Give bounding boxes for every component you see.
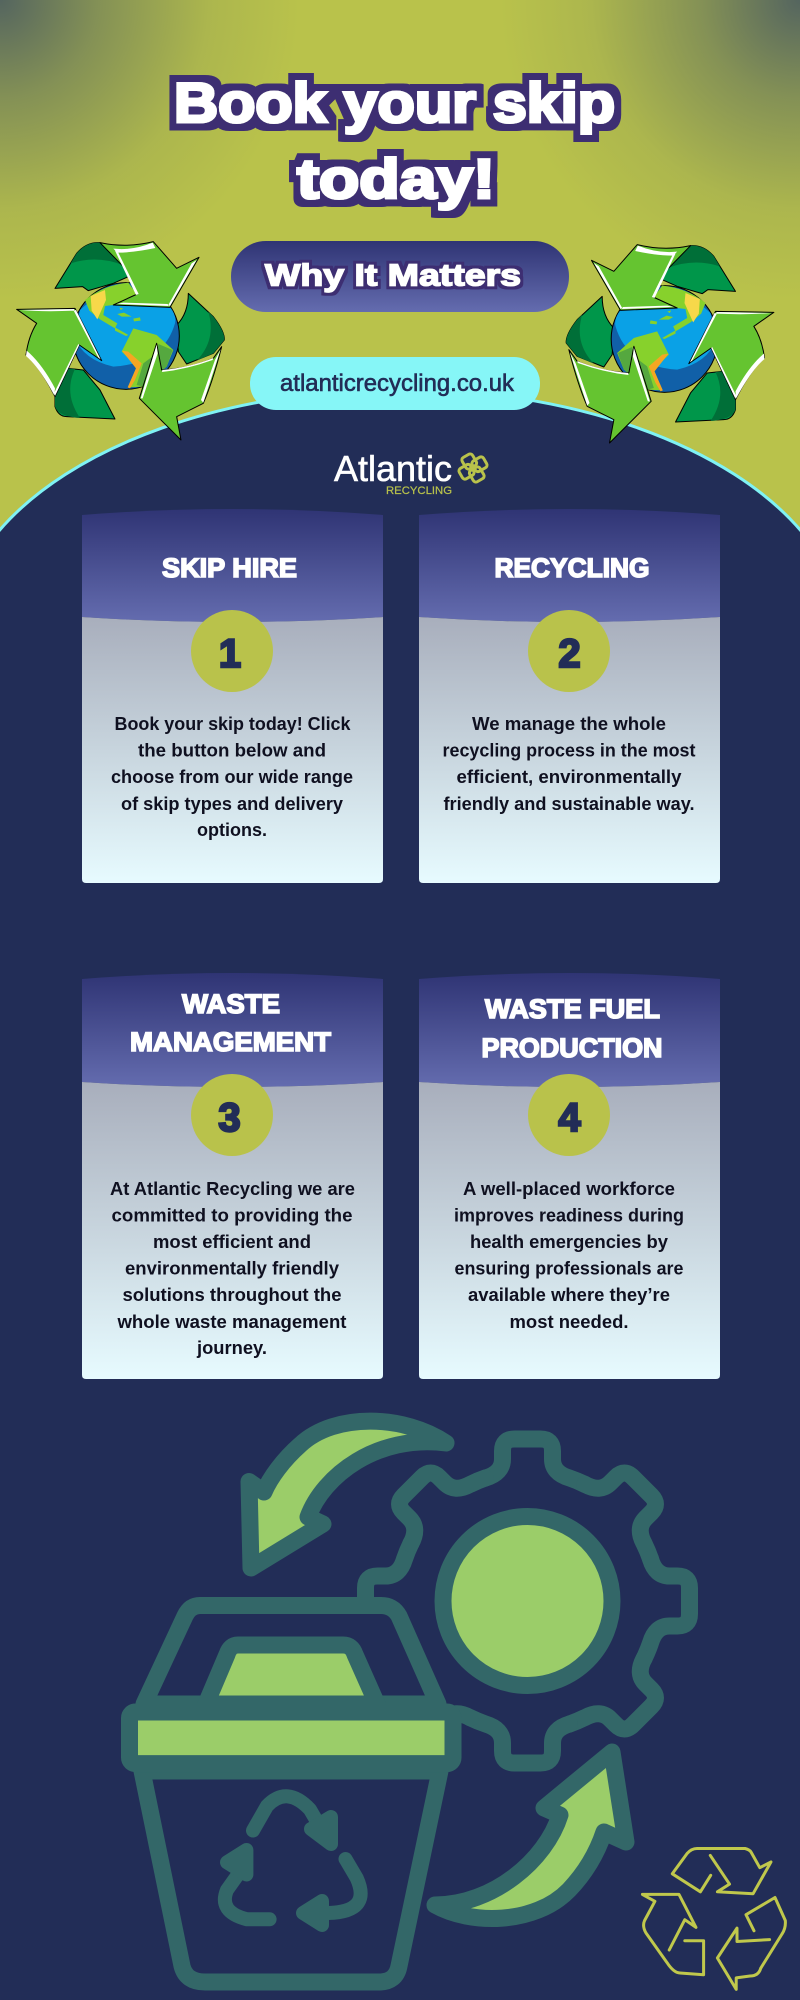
panel: waste fuel production: ensuring professionals are [454, 1258, 684, 1278]
panel: waste management: MANAGEMENT [130, 1027, 332, 1057]
website pill [250, 357, 540, 410]
panel: waste management [82, 973, 383, 1379]
icon: recycling globe left [17, 242, 224, 440]
icon: gear [366, 1439, 690, 1763]
panel: waste fuel production: PRODUCTION [482, 1033, 662, 1063]
dome panel with cyan outline [0, 389, 800, 640]
panel: skip hire: Book your skip today! Click [114, 714, 351, 734]
panel: skip hire: of skip types and delivery [121, 794, 343, 814]
panel: waste fuel production: 4 [558, 1096, 581, 1140]
panel: skip hire: the button below and [138, 740, 326, 760]
panel: recycling: efficient, environmentally [456, 767, 682, 787]
icon: recycling globe right [566, 245, 774, 443]
panel: skip hire: SKIP HIRE [162, 553, 297, 583]
panel: recycling: friendly and sustainable way. [444, 794, 694, 814]
panel: waste fuel production: WASTE FUEL [485, 994, 660, 1024]
logo [334, 448, 488, 497]
logo: RECYCLING [386, 485, 452, 497]
panel: recycling [419, 509, 720, 883]
panel: recycling: recycling process in the most [442, 740, 696, 760]
panel: waste fuel production: A well-placed workforce [463, 1179, 675, 1199]
panel: recycling: We manage the whole [472, 714, 666, 734]
panel: waste fuel production [419, 973, 720, 1379]
logo: Atlantic [334, 448, 452, 489]
panel: recycling: 2 [558, 632, 581, 676]
panel: waste management: solutions throughout the [122, 1285, 342, 1305]
title: today! [297, 147, 495, 210]
panel: waste management: At Atlantic Recycling we are [110, 1179, 355, 1199]
panel: waste management: whole waste management [116, 1312, 346, 1332]
panel: skip hire: choose from our wide range [111, 767, 353, 787]
icon: small recycling outline [642, 1848, 785, 1989]
panel: waste fuel production: improves readiness during [454, 1206, 684, 1226]
subtitle pill [231, 241, 569, 312]
icon: bin [130, 1606, 453, 1982]
panel: waste fuel production: health emergencies by [470, 1232, 668, 1252]
panel: waste management: committed to providing the [112, 1206, 352, 1226]
panel: waste management: journey. [196, 1338, 267, 1358]
panel: recycling: RECYCLING [494, 553, 650, 583]
title [174, 71, 615, 210]
icon: curved arrow bottom [435, 1752, 626, 1919]
icon: curved arrow top [249, 1421, 446, 1568]
panel: waste management: WASTE [182, 989, 280, 1019]
panel: waste management: environmentally friendly [125, 1258, 339, 1278]
subtitle pill: Why It Matters [265, 258, 521, 292]
panel: waste management: 3 [218, 1096, 241, 1140]
panel: skip hire [82, 509, 383, 883]
title: Book your skip [174, 71, 615, 134]
icon: bin recycling symbol [225, 1796, 361, 1925]
panel: waste fuel production: most needed. [510, 1312, 628, 1332]
panel: skip hire: options. [197, 820, 267, 840]
panel: waste fuel production: available where they’re [468, 1285, 670, 1305]
panel: waste management: most efficient and [153, 1232, 311, 1252]
panel: skip hire: 1 [219, 632, 241, 676]
illustration: recycling bin, gear and arrows [130, 1421, 690, 1982]
website pill: atlanticrecycling.co.uk [280, 370, 515, 397]
